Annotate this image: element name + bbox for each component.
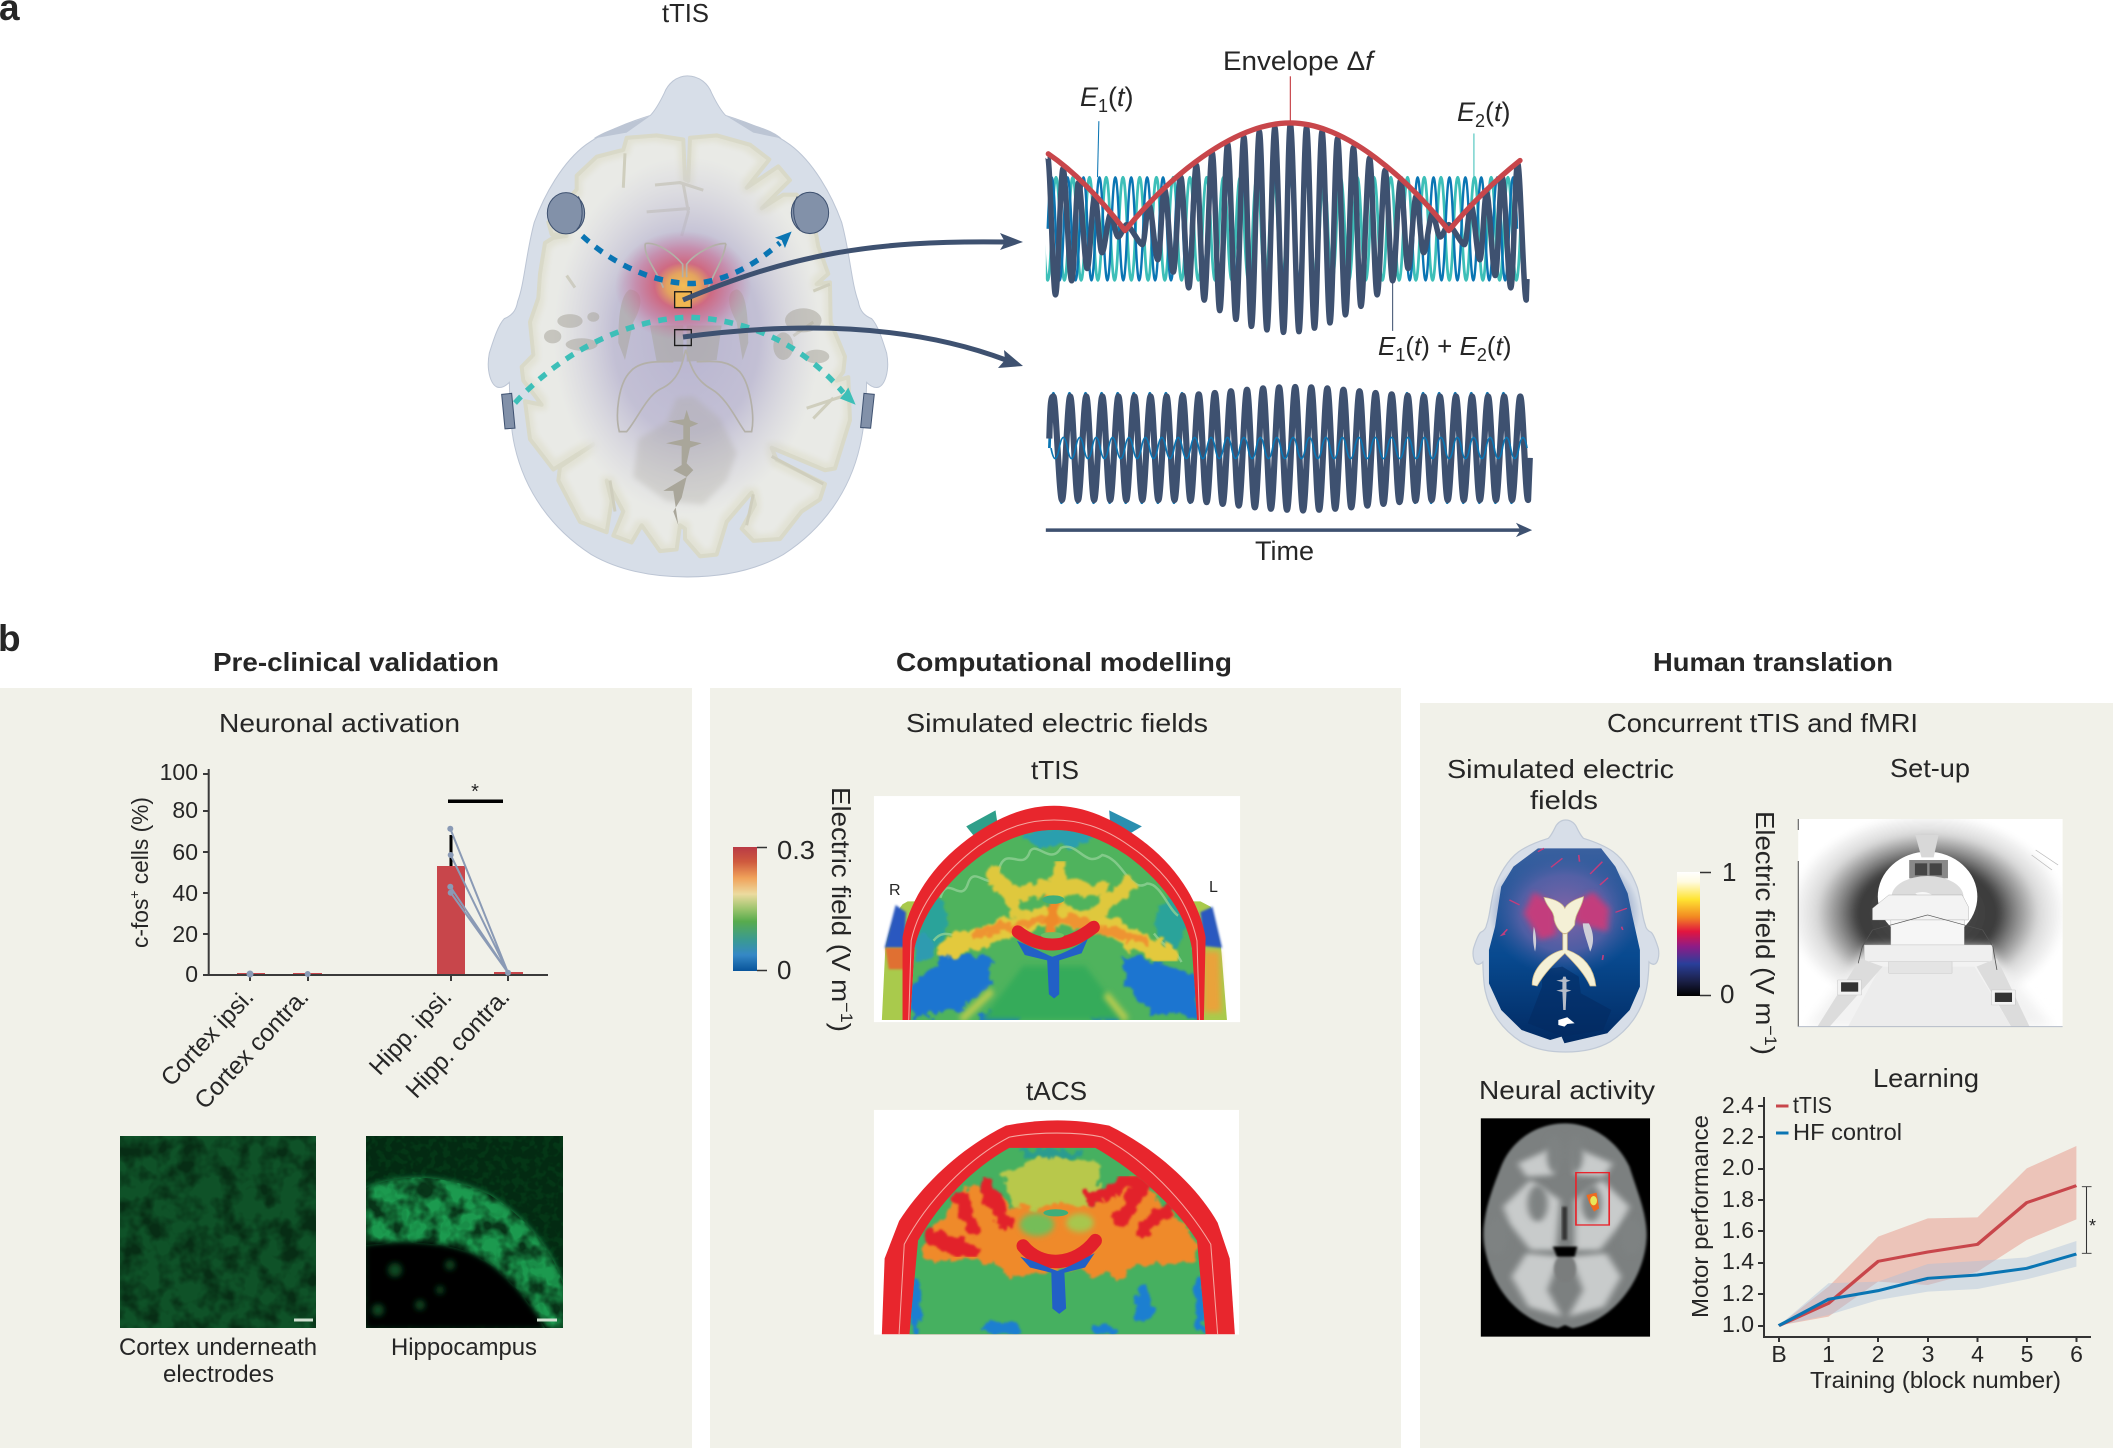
E2 wave bbox=[1043, 177, 1520, 280]
blue patches bbox=[908, 828, 1200, 1024]
region of interest bbox=[1576, 1173, 1609, 1225]
head outline bbox=[1484, 1123, 1647, 1328]
y axis label: + bbox=[126, 891, 142, 899]
subtitle set-up: Set-up bbox=[1890, 753, 1970, 783]
white matter bbox=[1503, 1148, 1629, 1317]
significance bar bbox=[448, 800, 503, 803]
label L: L bbox=[1209, 879, 1218, 896]
x tick labels: 5 bbox=[2021, 1341, 2033, 1367]
lower sum bbox=[1049, 387, 1530, 510]
heat map: tTIS bbox=[874, 796, 1240, 1024]
grey nuclei bbox=[1481, 1148, 1606, 1250]
heat map: tACS bbox=[874, 1110, 1239, 1335]
brain interior bbox=[910, 830, 1197, 1020]
significance star: * bbox=[2089, 1216, 2096, 1236]
orange field bbox=[923, 1176, 1197, 1278]
data points bbox=[246, 826, 511, 978]
yellow orange field bbox=[947, 866, 1168, 957]
pink field bbox=[1524, 892, 1609, 940]
illustration: head with electrodes and brain bbox=[488, 76, 888, 577]
legend: tTIS bbox=[1793, 1092, 1832, 1118]
leader E2 bbox=[1472, 133, 1475, 177]
x labels: Cortex contra. bbox=[190, 984, 314, 1115]
head outline bbox=[488, 76, 888, 577]
midline fissure bbox=[663, 410, 702, 525]
y tick labels: 20 bbox=[172, 921, 198, 947]
y tick labels: 2.2 bbox=[1722, 1123, 1754, 1149]
y tick labels bbox=[1722, 1092, 1754, 1337]
red arc bbox=[1023, 1241, 1095, 1261]
colour bar title: −1 bbox=[1761, 1025, 1780, 1046]
heading: pre-clinical: Pre-clinical validation bbox=[213, 647, 499, 677]
x tick labels: 4 bbox=[1971, 1341, 1984, 1367]
colour bar: 0 bbox=[777, 955, 791, 985]
paired lines bbox=[450, 829, 508, 973]
hot spot bbox=[615, 231, 752, 341]
subtitle: Simulated electric fields bbox=[906, 708, 1208, 738]
label E2: 2 bbox=[1475, 111, 1485, 131]
bar chart: c-fos bbox=[126, 759, 548, 1115]
label E1 + E2: ( bbox=[1487, 331, 1496, 361]
bone ring bbox=[903, 806, 1206, 1020]
label E1 + E2: t) + E bbox=[1414, 331, 1477, 361]
y tick labels: 40 bbox=[172, 880, 198, 906]
y tick labels: 1.0 bbox=[1722, 1311, 1754, 1337]
subtitle: Neuronal activation bbox=[219, 708, 460, 738]
x labels: Cortex ipsi. bbox=[156, 984, 259, 1092]
tTIS line bbox=[1779, 1186, 2076, 1326]
top patches bbox=[966, 810, 997, 835]
y tick labels: 60 bbox=[172, 839, 198, 865]
electrode side right bbox=[861, 393, 874, 428]
photo: MRI set-up bbox=[1789, 813, 2066, 1027]
subtitle neural activity: Neural activity bbox=[1479, 1075, 1655, 1105]
HF control line bbox=[1779, 1254, 2076, 1326]
lower waveforms bbox=[1049, 387, 1530, 510]
y axis title: Motor performance bbox=[1687, 1115, 1713, 1318]
panel: computational modelling bbox=[710, 688, 1401, 1448]
x tick labels bbox=[1771, 1341, 2083, 1367]
off-target box bbox=[675, 330, 691, 345]
colour bar: 0.3 bbox=[777, 835, 815, 865]
subtitle: Concurrent tTIS and fMRI bbox=[1607, 708, 1918, 738]
activation spot bbox=[1586, 1193, 1599, 1212]
centre green bbox=[1042, 895, 1064, 904]
scalp bbox=[882, 901, 1227, 1020]
panel: human translation bbox=[1420, 703, 2113, 1448]
axes bbox=[203, 769, 548, 981]
colour bar title: ) bbox=[1750, 1046, 1780, 1055]
summed wave bbox=[1048, 124, 1527, 332]
y tick labels: 0 bbox=[185, 961, 198, 987]
leader envelope bbox=[1289, 76, 1292, 123]
label E1: t) bbox=[1117, 82, 1134, 112]
chart: interference waveforms bbox=[1043, 76, 1532, 537]
y tick labels: 1.6 bbox=[1722, 1217, 1754, 1243]
label E2: ( bbox=[1485, 97, 1494, 127]
x tick labels: 6 bbox=[2070, 1341, 2083, 1367]
y axis label: cells (%) bbox=[127, 797, 153, 891]
current path teal bbox=[515, 317, 856, 405]
x tick labels: 1 bbox=[1822, 1341, 1835, 1367]
caption: cortex bbox=[119, 1334, 317, 1388]
colour bar: 0 bbox=[1720, 979, 1734, 1009]
electrode side left bbox=[502, 393, 515, 429]
electric field glow bbox=[553, 157, 820, 515]
envelope bbox=[1048, 123, 1520, 231]
significance star: * bbox=[471, 781, 479, 803]
x labels: Hipp. ipsi. bbox=[364, 984, 457, 1081]
heading: human: Human translation bbox=[1653, 647, 1893, 677]
subtitle tACS: tACS bbox=[1026, 1076, 1087, 1106]
label R: R bbox=[889, 882, 901, 899]
colour bar bbox=[733, 835, 815, 985]
subtitle learning: Learning bbox=[1873, 1063, 1979, 1093]
x labels: Hipp. contra. bbox=[401, 984, 515, 1104]
label E1 + E2: 2 bbox=[1477, 345, 1487, 365]
white matter bbox=[522, 135, 850, 556]
x labels bbox=[156, 984, 515, 1115]
blue edges bbox=[910, 1148, 1206, 1335]
colour bar: 1 bbox=[1722, 857, 1736, 887]
sulci bbox=[567, 153, 848, 525]
colour bar title: ) bbox=[826, 1023, 856, 1032]
E1 wave bbox=[1048, 177, 1517, 280]
target box bbox=[675, 292, 691, 308]
deep grey structures bbox=[544, 289, 829, 363]
top yellow zone bbox=[1002, 1151, 1102, 1212]
red fingers bbox=[930, 1180, 1171, 1253]
small head with field map bbox=[1473, 820, 1659, 1052]
axes bbox=[1758, 1097, 2091, 1342]
subtitle tTIS: tTIS bbox=[1031, 755, 1079, 785]
dashed arc bbox=[899, 1133, 1218, 1334]
ventricles bbox=[1017, 939, 1088, 999]
y axis label: c-fos bbox=[127, 898, 153, 948]
micrograph: cortex bbox=[120, 1136, 316, 1328]
confidence band HF bbox=[1779, 1241, 2076, 1326]
caption: cortex: electrodes bbox=[163, 1361, 274, 1388]
significance bracket bbox=[2082, 1187, 2092, 1253]
x tick labels: B bbox=[1771, 1341, 1787, 1367]
electrode top right bbox=[791, 192, 829, 234]
head shadow bbox=[593, 116, 782, 139]
red arc bbox=[1018, 927, 1094, 944]
time arrow bbox=[1046, 523, 1532, 537]
lower E1 bbox=[1049, 393, 1516, 503]
label E2: E bbox=[1457, 97, 1476, 127]
legend bbox=[1776, 1092, 1902, 1145]
label Time: Time bbox=[1255, 536, 1314, 566]
lower E2 bbox=[1051, 438, 1527, 459]
y tick labels: 80 bbox=[172, 797, 198, 823]
brain interior bbox=[909, 1148, 1206, 1334]
x tick labels: 2 bbox=[1872, 1341, 1884, 1367]
gyri bbox=[934, 847, 1181, 962]
colour bar title: Electric field (V m bbox=[826, 787, 856, 989]
ventricles bbox=[1532, 897, 1596, 986]
ventricles bbox=[1020, 1253, 1095, 1314]
colour bar title: −1 bbox=[837, 1002, 856, 1023]
label E1 + E2: 1 bbox=[1395, 345, 1405, 365]
label E1 + E2: E bbox=[1378, 331, 1396, 361]
label E1 + E2: ( bbox=[1405, 331, 1414, 361]
y tick labels: 100 bbox=[160, 759, 198, 785]
label E2: t) bbox=[1494, 97, 1511, 127]
lower green bbox=[982, 966, 1126, 1020]
y tick labels: 1.8 bbox=[1722, 1186, 1754, 1212]
label E1 + E2: t) bbox=[1496, 331, 1512, 361]
fMRI brain scan bbox=[1481, 1118, 1650, 1337]
electrode top left bbox=[547, 193, 585, 234]
colour bar bbox=[1677, 857, 1736, 1009]
leader E1 bbox=[1097, 121, 1099, 177]
panel: pre-clinical validation bbox=[0, 688, 692, 1448]
cortex bbox=[522, 135, 850, 556]
vessels bbox=[1502, 848, 1627, 960]
caption: cortex: Cortex underneath bbox=[119, 1334, 317, 1361]
subtitle simulated fields: Simulated electric bbox=[1447, 754, 1674, 784]
midline bbox=[1556, 977, 1571, 1010]
field map bbox=[1489, 848, 1640, 1043]
caption: hippocampus: Hippocampus bbox=[391, 1334, 537, 1361]
subtitle simulated fields: fields bbox=[1530, 785, 1598, 815]
label E1: E bbox=[1080, 82, 1099, 112]
line chart: motor performance bbox=[1687, 1092, 2096, 1393]
arrow: target to upper waveform bbox=[683, 233, 1023, 300]
current path blue bbox=[582, 231, 792, 284]
confidence band tTIS bbox=[1779, 1146, 2076, 1326]
y tick labels bbox=[160, 759, 198, 987]
y tick labels: 1.2 bbox=[1722, 1280, 1754, 1306]
x axis title: Training (block number) bbox=[1810, 1367, 2061, 1393]
label Envelope: Envelope Δf bbox=[1223, 46, 1376, 76]
bars bbox=[237, 866, 523, 975]
y tick labels: 1.4 bbox=[1722, 1248, 1754, 1274]
colour bar title: Electric field (V m bbox=[1750, 811, 1780, 1013]
subtitle simulated fields bbox=[1447, 754, 1674, 815]
y tick labels: 2.4 bbox=[1722, 1092, 1754, 1118]
label E1: 1 bbox=[1098, 96, 1108, 116]
scalp bbox=[882, 1120, 1235, 1334]
dashed arc bbox=[909, 820, 1199, 1020]
ventricles bbox=[617, 243, 753, 432]
leader sum bbox=[1391, 281, 1394, 331]
y tick labels: 2.0 bbox=[1722, 1154, 1754, 1180]
legend: HF control bbox=[1793, 1119, 1902, 1145]
error bar bbox=[450, 835, 452, 866]
label E1: ( bbox=[1108, 82, 1117, 112]
arrow: off-target to lower waveform bbox=[683, 328, 1023, 368]
micrograph: hippocampus bbox=[366, 1136, 563, 1328]
x tick labels: 3 bbox=[1922, 1341, 1934, 1367]
occipital grey area bbox=[633, 396, 737, 505]
heading: computational: Computational modelling bbox=[896, 647, 1232, 677]
